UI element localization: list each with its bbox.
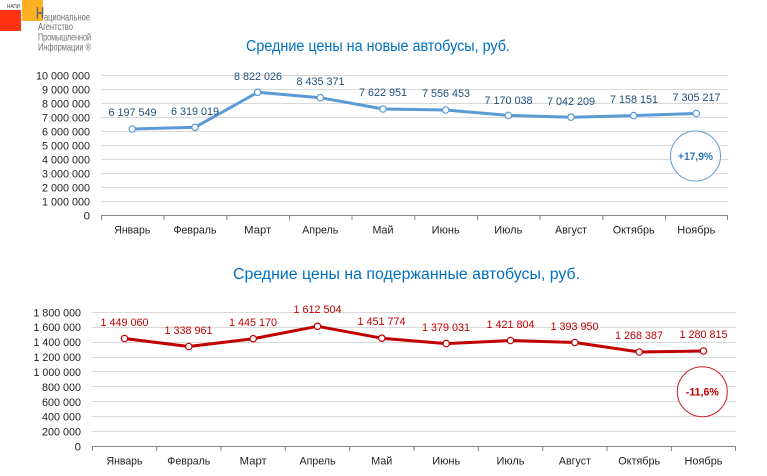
x axis months: Январь <box>114 224 151 236</box>
x axis months: Апрель <box>302 224 339 236</box>
title: new buses: Средние цены на новые автобусы, руб. <box>246 38 510 55</box>
x axis months: Июнь <box>432 224 460 236</box>
y axis labels: 600 000 <box>42 397 81 409</box>
y axis labels: 200 000 <box>42 426 81 438</box>
x axis months: Август <box>559 456 591 468</box>
logo: НАПИ: ациональное <box>44 12 90 24</box>
data labels: used buses: 1 445 170 <box>229 317 277 329</box>
callout: +17,9%: +17,9% <box>678 151 713 163</box>
y axis labels: 1 800 000 <box>34 308 81 320</box>
logo: НАПИ <box>0 0 91 54</box>
y axis labels: 10 000 000 <box>36 70 90 82</box>
y axis labels: 400 000 <box>42 412 81 424</box>
data labels: new buses: 7 170 038 <box>484 95 532 107</box>
chart: new bus prices <box>36 70 728 236</box>
callout: -11,6% <box>677 367 727 417</box>
x axis months: Февраль <box>167 456 211 468</box>
x axis months: Июль <box>496 456 525 468</box>
data labels: used buses: 1 379 031 <box>422 322 470 334</box>
y axis labels: 8 000 000 <box>42 98 90 110</box>
callout: -11,6%: -11,6% <box>686 386 719 398</box>
y axis labels: 5 000 000 <box>42 140 90 152</box>
y axis labels: 0 <box>84 210 90 222</box>
data labels: used buses: 1 280 815 <box>680 329 728 341</box>
data labels: new buses: 7 158 151 <box>610 94 658 106</box>
y axis labels: 0 <box>75 442 81 454</box>
data labels: new buses: 7 305 217 <box>672 92 720 104</box>
y axis labels: 2 000 000 <box>42 182 90 194</box>
data labels: new buses: 7 556 453 <box>422 88 470 100</box>
data line: used buses <box>121 323 707 355</box>
logo: НАПИ: НАПИ <box>7 4 20 10</box>
x axis months: Октябрь <box>613 224 655 236</box>
data labels: new buses: 6 319 019 <box>171 106 219 118</box>
data labels: new buses: 7 622 951 <box>359 87 407 99</box>
data labels: used buses: 1 393 950 <box>550 321 598 333</box>
y axis labels: 4 000 000 <box>42 154 90 166</box>
data labels: new buses: 8 435 371 <box>296 76 344 88</box>
x axis months: Май <box>371 456 392 468</box>
x axis months: Март <box>240 456 267 468</box>
title: used buses: Средние цены на подержанные автобусы, руб. <box>233 266 580 283</box>
y axis labels <box>34 308 81 454</box>
logo: НАПИ: Агентство <box>38 21 73 33</box>
logo: НАПИ: Промышленной <box>38 32 91 44</box>
x axis months <box>114 224 716 236</box>
x axis months: Ноябрь <box>677 224 716 236</box>
data labels: used buses: 1 268 387 <box>615 330 663 342</box>
x axis months: Июнь <box>432 456 460 468</box>
data labels: new buses <box>108 71 720 119</box>
y axis labels: 9 000 000 <box>42 84 90 96</box>
data labels: used buses: 1 451 774 <box>358 316 406 328</box>
y axis labels: 1 400 000 <box>34 337 81 349</box>
x axis months: Ноябрь <box>684 456 723 468</box>
data labels: new buses: 8 822 026 <box>234 71 282 83</box>
y axis labels: 1 000 000 <box>34 367 81 379</box>
data labels: used buses: 1 449 060 <box>100 317 148 329</box>
x axis months: Февраль <box>174 224 217 236</box>
x axis months: Март <box>244 224 271 236</box>
chart: used bus prices <box>34 304 736 468</box>
x axis months: Январь <box>106 456 143 468</box>
x axis months: Апрель <box>300 456 336 468</box>
data labels: used buses: 1 338 961 <box>164 325 212 337</box>
data labels: used buses <box>100 304 728 342</box>
y axis labels: 800 000 <box>42 382 81 394</box>
x axis months <box>106 456 723 468</box>
y axis labels <box>36 70 90 222</box>
x axis months: Август <box>555 224 587 236</box>
data labels: used buses: 1 612 504 <box>294 304 342 316</box>
y axis labels: 3 000 000 <box>42 168 90 180</box>
y axis labels: 6 000 000 <box>42 126 90 138</box>
data labels: new buses: 6 197 549 <box>108 107 156 119</box>
logo: НАПИ: Н <box>36 6 44 22</box>
y axis labels: 7 000 000 <box>42 112 90 124</box>
data line: new buses <box>129 89 700 132</box>
data labels: new buses: 7 042 209 <box>547 96 595 108</box>
logo: НАПИ: Информации ® <box>38 42 91 54</box>
x axis months: Май <box>372 224 394 236</box>
y axis labels: 1 000 000 <box>42 196 90 208</box>
callout: +17,9% <box>670 131 720 181</box>
x axis months: Июль <box>494 224 523 236</box>
y axis labels: 1 200 000 <box>34 352 81 364</box>
data labels: used buses: 1 421 804 <box>486 319 534 331</box>
x axis months: Октябрь <box>618 456 660 468</box>
y axis labels: 1 600 000 <box>34 322 81 334</box>
